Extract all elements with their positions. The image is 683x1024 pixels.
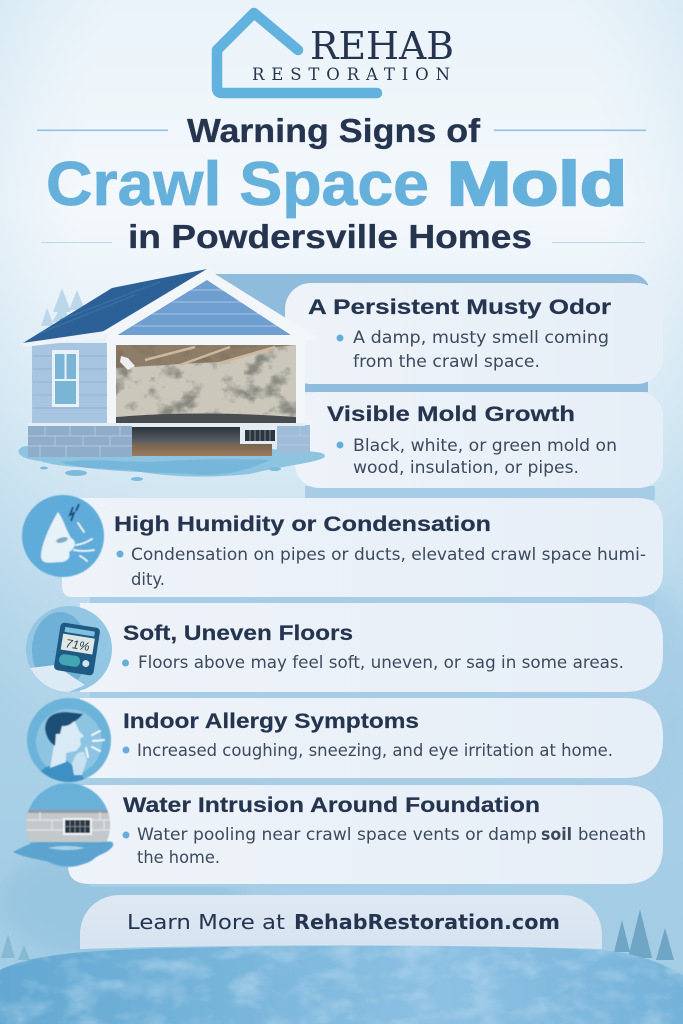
card: High Humidity or Condensation xyxy=(60,498,663,597)
card: Visible Mold Growth xyxy=(295,392,663,488)
card: Water Intrusion Around Foundation xyxy=(68,785,663,884)
icon: humidity meter reading 71% xyxy=(26,606,112,700)
card: Soft, Uneven Floors: Soft, Uneven Floors xyxy=(123,621,353,645)
card: Water Intrusion Around Foundation: soil xyxy=(541,825,572,844)
card: Soft, Uneven Floors xyxy=(80,603,663,692)
ground hill xyxy=(0,946,683,1024)
house illustration xyxy=(19,269,325,481)
card: High Humidity or Condensation: dity. xyxy=(131,570,165,589)
left eave xyxy=(23,331,105,347)
card: Visible Mold Growth: wood, insulation, or pipes. xyxy=(353,458,579,477)
back band behind top cards xyxy=(215,274,648,392)
roof xyxy=(23,269,207,343)
call to action: Learn More at xyxy=(127,910,285,934)
card: Water Intrusion Around Foundation: Water Intrusion Around Foundation xyxy=(123,793,540,817)
card: High Humidity or Condensation: Condensation on pipes or ducts, elevated crawl space humi- xyxy=(131,545,646,564)
back band behind lower cards xyxy=(90,595,655,887)
flood water xyxy=(19,446,325,477)
call to action xyxy=(80,895,602,949)
card: Water Intrusion Around Foundation: the home. xyxy=(137,848,220,867)
trees left xyxy=(1,934,30,960)
logo wordmark: REHAB xyxy=(310,24,454,68)
call to action: RehabRestoration.com xyxy=(294,910,560,934)
card: A Persistent Musty Odor xyxy=(285,283,663,384)
ground texture xyxy=(0,945,683,1024)
title: in Powdersville Homes xyxy=(128,218,532,255)
card: Indoor Allergy Symptoms: Indoor Allergy Symptoms xyxy=(123,709,419,733)
logo: RESTORATION xyxy=(252,65,450,84)
moldy crawl space interior xyxy=(116,345,296,423)
foundation xyxy=(28,425,132,457)
icon: humidity meter reading 71%: 71% xyxy=(65,636,91,654)
window xyxy=(52,350,79,407)
icon: nose smelling odor xyxy=(22,495,104,577)
card: A Persistent Musty Odor: A damp, musty smell coming xyxy=(353,328,609,347)
card: High Humidity or Condensation: High Humidity or Condensation xyxy=(114,512,491,536)
white gable trim xyxy=(102,269,318,341)
icon: foundation vent with pooling water xyxy=(13,783,113,867)
icon: man sneezing xyxy=(27,698,111,790)
white frame xyxy=(107,335,305,425)
card: Soft, Uneven Floors: Floors above may feel soft, uneven, or sag in some areas. xyxy=(138,653,624,672)
title xyxy=(37,112,646,255)
logo xyxy=(217,13,454,93)
title: Crawl Space xyxy=(46,150,429,219)
card: Water Intrusion Around Foundation: beneath xyxy=(578,825,646,844)
title: Warning Signs of xyxy=(187,112,481,149)
vent xyxy=(240,427,277,444)
card: Indoor Allergy Symptoms xyxy=(80,698,663,778)
left wall xyxy=(32,343,108,424)
card: Visible Mold Growth: Visible Mold Growth xyxy=(327,402,575,426)
trees behind house xyxy=(41,288,85,326)
card: Water Intrusion Around Foundation: Water pooling near crawl space vents or damp xyxy=(137,825,537,844)
title: Mold xyxy=(447,150,627,219)
card: A Persistent Musty Odor: from the crawl space. xyxy=(353,352,540,371)
logo house outline xyxy=(217,13,377,93)
crawl opening xyxy=(132,427,272,456)
card: Indoor Allergy Symptoms: Increased coughing, sneezing, and eye irritation at home. xyxy=(137,741,613,760)
card: Visible Mold Growth: Black, white, or green mold on xyxy=(353,436,617,455)
footer ground and trees xyxy=(0,909,683,1024)
gable xyxy=(113,277,300,336)
trees right xyxy=(614,909,674,960)
card: A Persistent Musty Odor: A Persistent Musty Odor xyxy=(308,295,612,319)
